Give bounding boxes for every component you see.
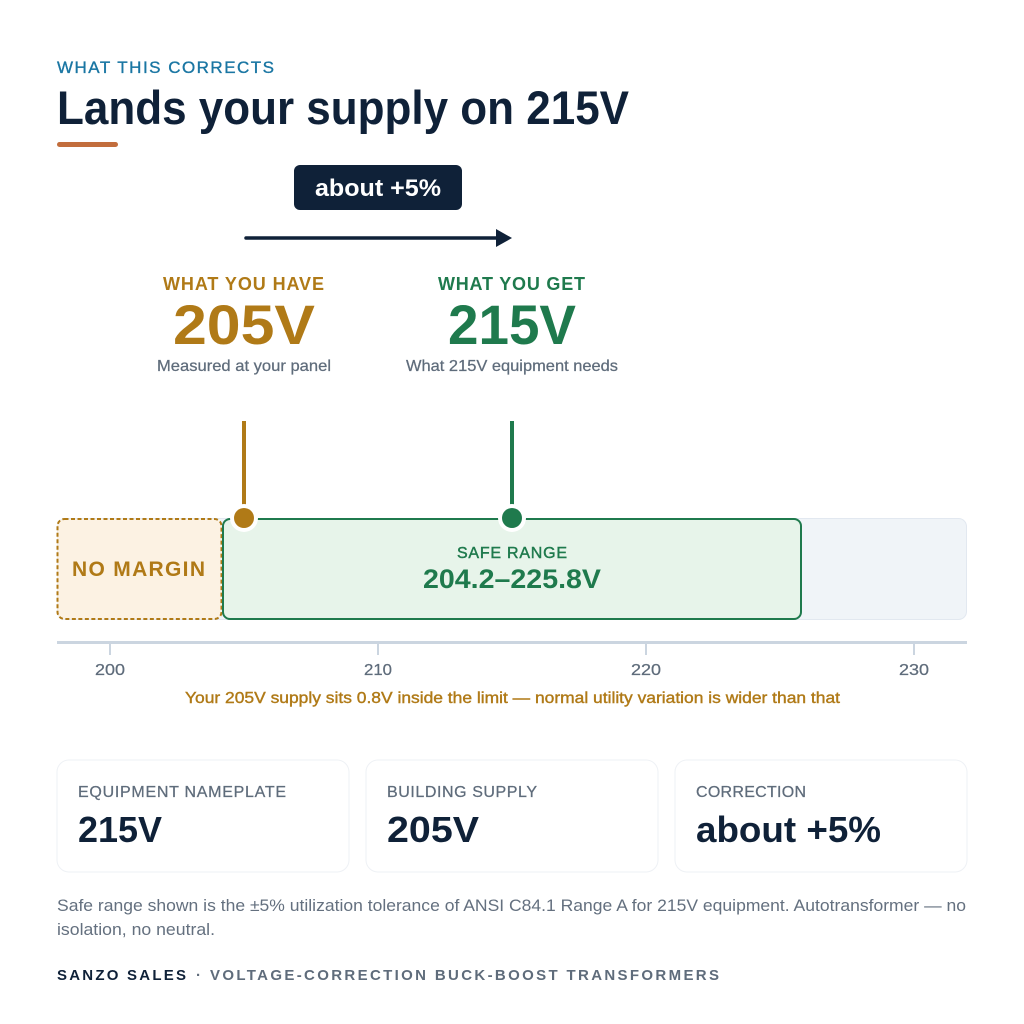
card: correction: CORRECTION	[696, 784, 806, 801]
what you get readout: What 215V equipment needs	[406, 358, 618, 375]
what you have readout: Measured at your panel	[157, 358, 331, 375]
footer brand line: SANZO SALES	[57, 967, 186, 984]
marker: 205V	[230, 421, 258, 532]
what you have readout	[157, 274, 331, 375]
card: correction: about +5%	[696, 809, 881, 850]
voltage range bar	[58, 518, 966, 620]
correction badge	[294, 165, 462, 210]
footer brand line: ·	[196, 967, 201, 984]
footnote: Safe range shown is the ±5% utilization tolerance of ANSI C84.1 Range A for 215V equipment. Autotransformer — no	[57, 897, 966, 915]
safe range zone: 204.2–225.8V	[423, 564, 601, 594]
voltage axis: 220	[631, 662, 661, 679]
what you have readout: 205V	[173, 293, 315, 356]
safe range zone	[223, 519, 801, 619]
card: equipment nameplate: 215V	[78, 809, 162, 850]
voltage axis: 230	[899, 662, 929, 679]
no margin zone	[58, 519, 222, 619]
marker: 215V	[498, 421, 526, 532]
footer brand line: VOLTAGE-CORRECTION BUCK-BOOST TRANSFORMERS	[210, 967, 719, 984]
card: building supply: BUILDING SUPPLY	[387, 784, 537, 801]
title: Lands your supply on 215V	[57, 81, 630, 134]
bar track	[58, 518, 966, 620]
no margin zone: NO MARGIN	[72, 558, 205, 581]
voltage axis: 210	[364, 662, 392, 679]
footnote: isolation, no neutral.	[57, 921, 215, 939]
card: correction	[675, 760, 967, 872]
what you get readout	[406, 274, 618, 375]
card: building supply: 205V	[387, 809, 479, 850]
footnote	[57, 897, 966, 939]
card: building supply	[366, 760, 658, 872]
voltage axis: 200	[95, 662, 125, 679]
title underline	[57, 142, 118, 147]
what you get readout: 215V	[448, 293, 576, 356]
what you get readout: WHAT YOU GET	[438, 274, 585, 294]
margin note: Your 205V supply sits 0.8V inside the limit — normal utility variation is wider than that	[185, 690, 841, 707]
arrow: 205V to 215V	[246, 229, 512, 247]
card: equipment nameplate	[57, 760, 349, 872]
voltage axis	[57, 641, 967, 679]
card: equipment nameplate: EQUIPMENT NAMEPLATE	[78, 784, 286, 801]
what you have readout: WHAT YOU HAVE	[163, 274, 324, 294]
eyebrow: WHAT THIS CORRECTS	[57, 58, 274, 77]
correction badge: about +5%	[315, 175, 441, 202]
safe range zone: SAFE RANGE	[457, 545, 567, 562]
